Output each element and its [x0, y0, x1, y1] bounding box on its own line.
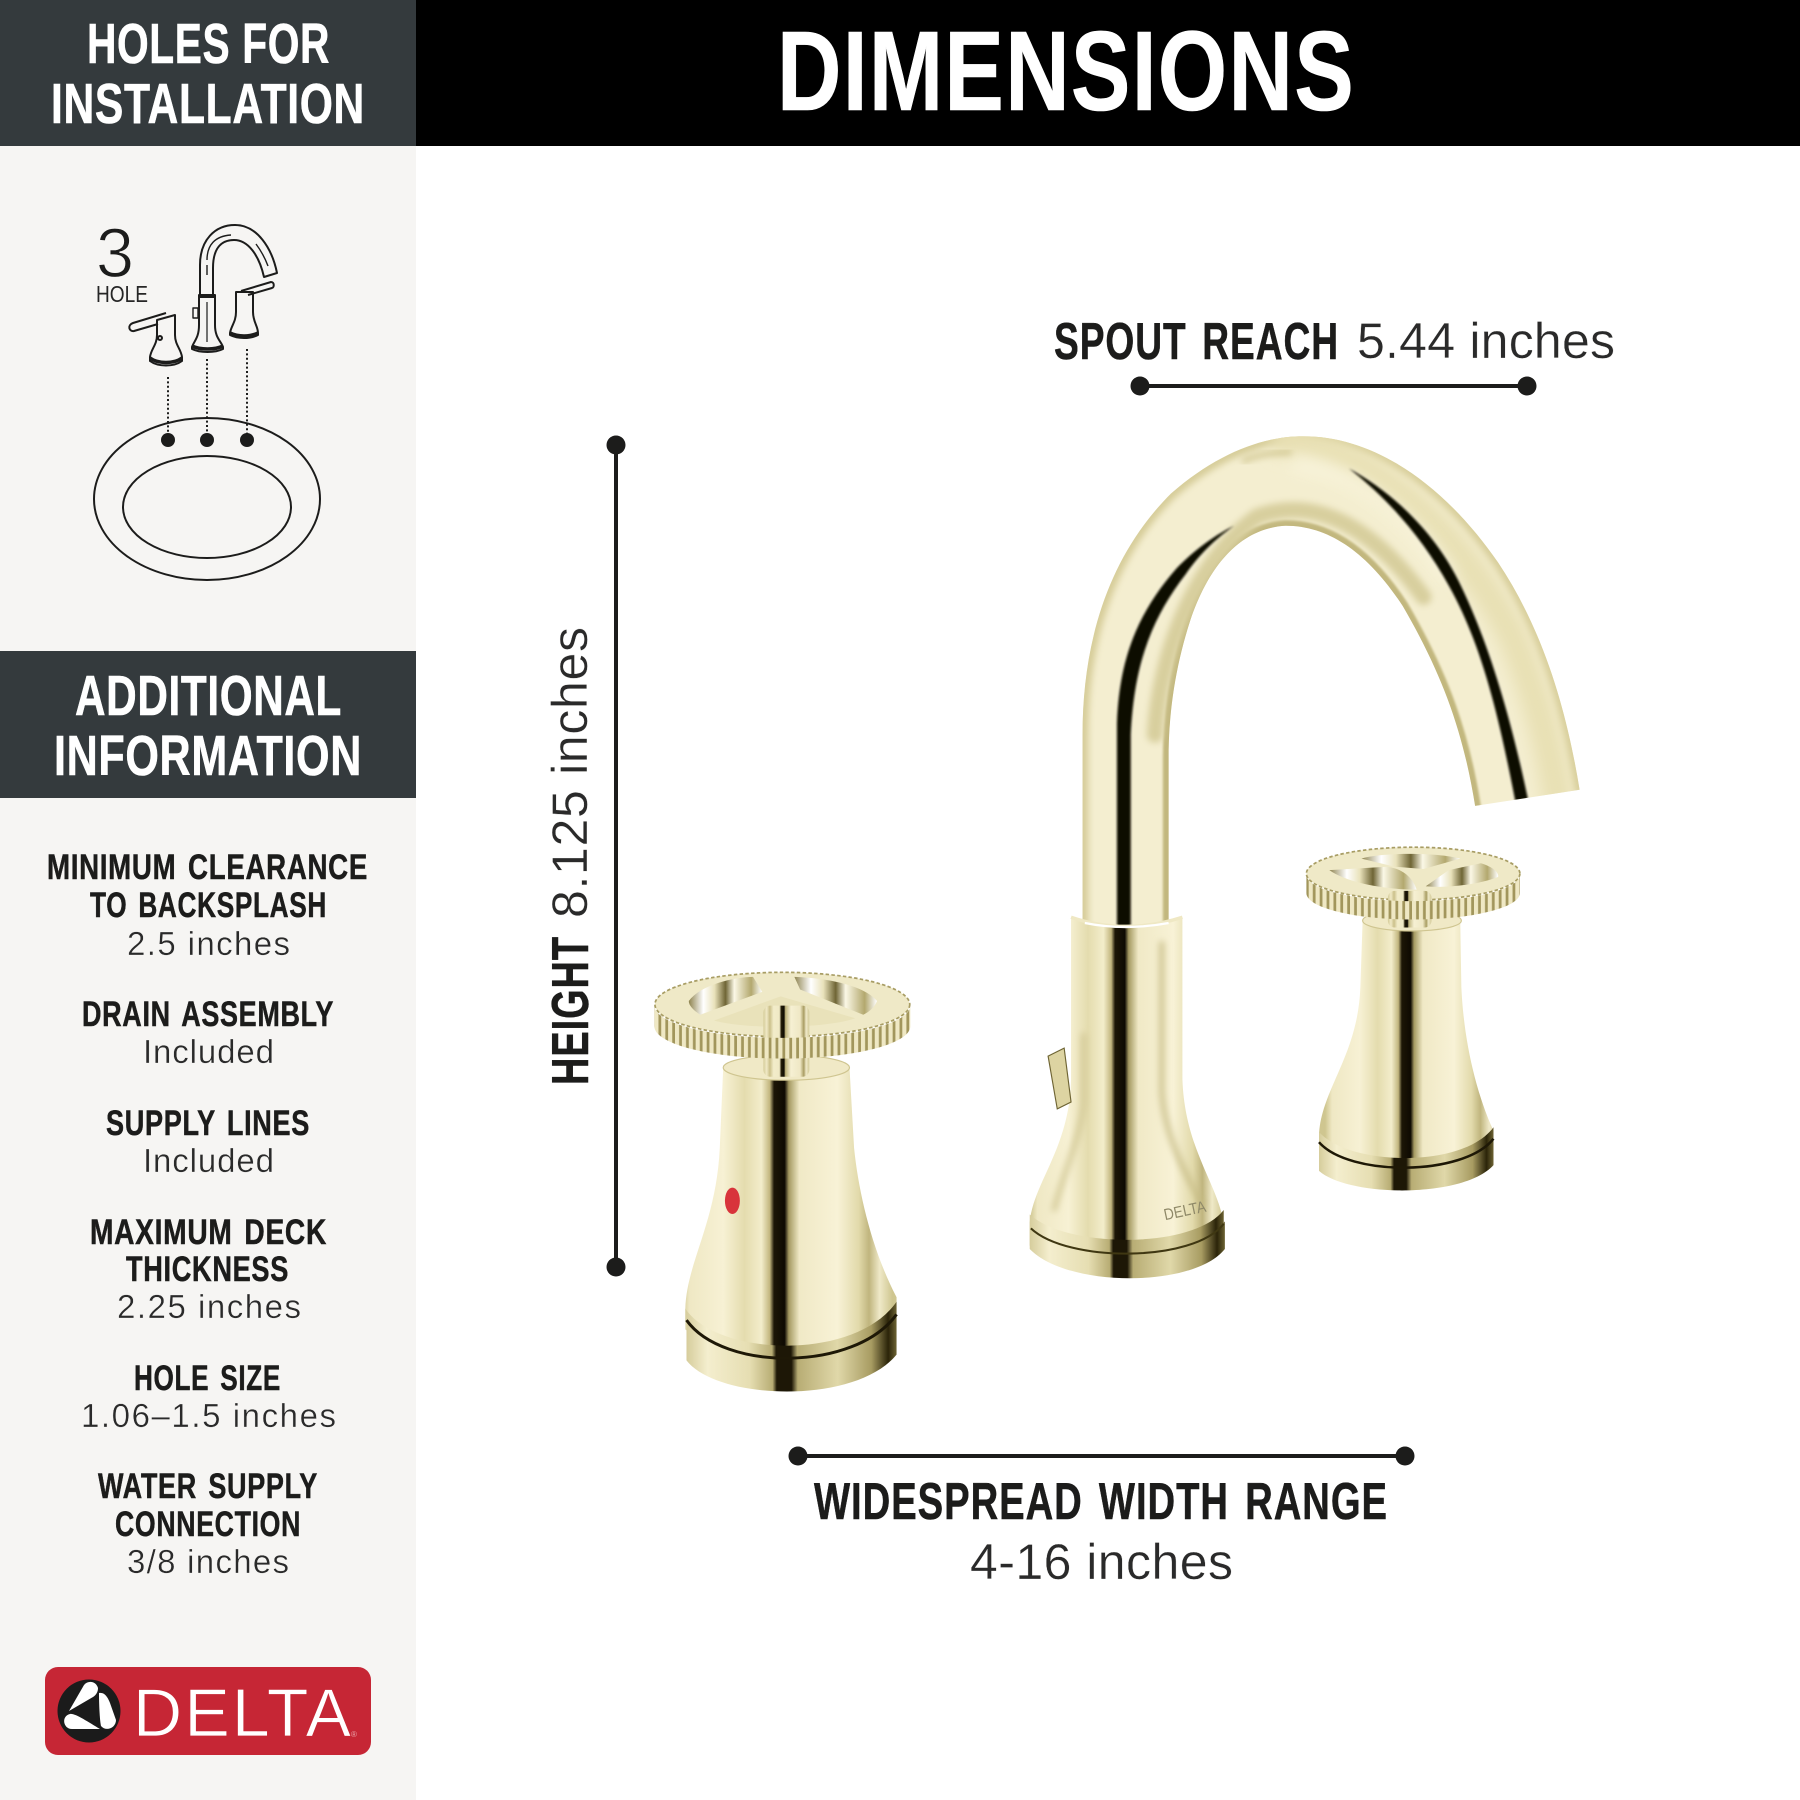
delta engraving: DELTA	[1162, 1198, 1208, 1224]
header: holes for installation: INSTALLATION	[51, 72, 365, 136]
text block: water supply connection: CONNECTION	[115, 1505, 301, 1544]
title: dimensions banner	[416, 0, 1800, 146]
text block: water supply connection: WATER SUPPLY	[98, 1467, 318, 1506]
icon: three hole faucet and basin diagram: HOLE	[96, 281, 148, 307]
header: additional information	[0, 651, 416, 798]
illustration: polished nickel widespread faucet	[654, 436, 1580, 1391]
text block: minimum clearance to backsplash	[47, 848, 368, 962]
left cross handle with wheel	[654, 972, 910, 1391]
callout: height dimension: HEIGHT	[542, 936, 600, 1085]
callout: widespread width range dimension	[788, 1446, 1414, 1590]
faucet base column	[1030, 917, 1225, 1278]
callout: spout reach dimension: SPOUT REACH	[1054, 313, 1339, 371]
header: holes for installation	[0, 0, 416, 146]
text block: minimum clearance to backsplash: 2.5 inches	[127, 925, 290, 962]
text block: drain assembly	[82, 995, 334, 1070]
gear wheel	[1306, 847, 1520, 928]
icon: three hole faucet and basin diagram: 3	[96, 214, 134, 292]
header: additional information: INFORMATION	[54, 724, 362, 788]
callout: height dimension	[542, 436, 626, 1276]
text block: supply lines	[106, 1104, 310, 1179]
text block: water supply connection	[98, 1467, 318, 1580]
text block: minimum clearance to backsplash: TO BACKSPLASH	[90, 886, 327, 925]
text block: maximum deck thickness: MAXIMUM DECK	[90, 1213, 327, 1252]
header: additional information: ADDITIONAL	[75, 664, 342, 728]
text block: hole size: 1.06–1.5 inches	[81, 1397, 336, 1434]
spout	[1083, 436, 1580, 930]
callout: spout reach dimension	[1054, 313, 1615, 396]
text block: drain assembly: Included	[143, 1033, 274, 1070]
panel: left sidebar	[0, 146, 416, 1800]
title: dimensions banner: DIMENSIONS	[777, 8, 1355, 134]
text block: hole size: HOLE SIZE	[134, 1359, 281, 1398]
text block: maximum deck thickness: 2.25 inches	[117, 1288, 301, 1325]
text block: maximum deck thickness: THICKNESS	[126, 1250, 289, 1289]
text block: supply lines: Included	[143, 1142, 274, 1179]
icon: three hole faucet and basin diagram	[94, 214, 320, 580]
text block: supply lines: SUPPLY LINES	[106, 1104, 310, 1143]
icon: delta logo: DELTA	[133, 1675, 352, 1751]
callout: widespread width range dimension: WIDESPREAD WIDTH RANGE	[814, 1473, 1388, 1531]
text block: maximum deck thickness	[90, 1213, 327, 1325]
drain lever	[1048, 1048, 1071, 1109]
right cross handle with wheel	[1306, 847, 1520, 1190]
icon: delta logo: ®	[351, 1730, 357, 1739]
callout: widespread width range dimension: 4-16 inches	[970, 1534, 1233, 1590]
callout: spout reach dimension: 5.44 inches	[1357, 313, 1615, 369]
text block: minimum clearance to backsplash: MINIMUM CLEARANCE	[47, 848, 368, 887]
text block: drain assembly: DRAIN ASSEMBLY	[82, 995, 334, 1034]
header: holes for installation: HOLES FOR	[87, 12, 330, 76]
text block: water supply connection: 3/8 inches	[127, 1543, 289, 1580]
red hot indicator	[725, 1188, 740, 1214]
text block: hole size	[81, 1359, 336, 1434]
callout: height dimension: 8.125 inches	[542, 627, 598, 918]
gear wheel	[654, 972, 910, 1077]
icon: delta logo	[45, 1667, 371, 1755]
